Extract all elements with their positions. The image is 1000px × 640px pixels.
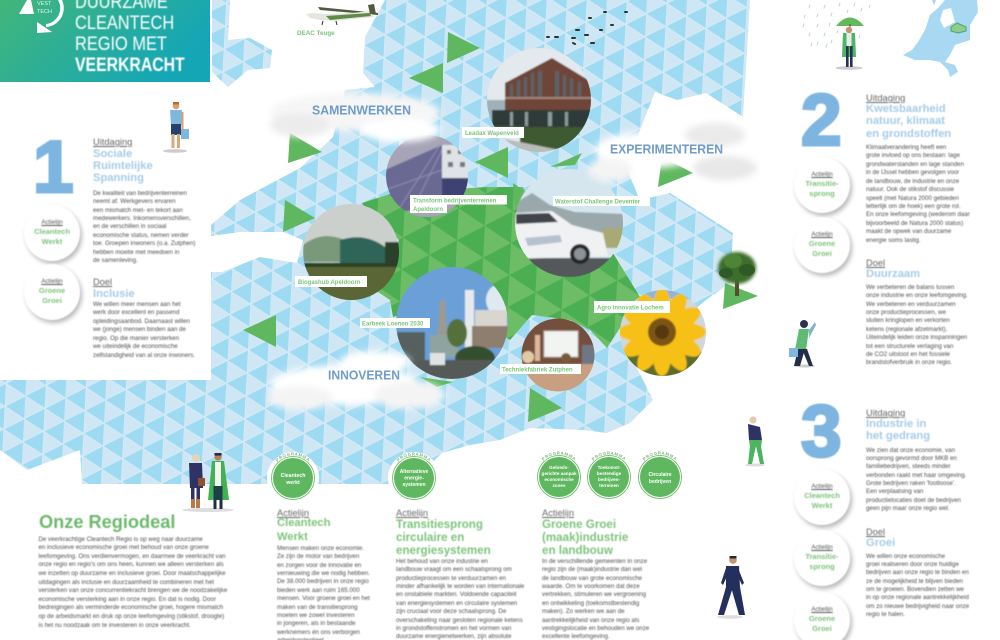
text: goal description: We willen onze economische (866, 553, 945, 560)
text: goal description: we (jonge) mensen binden aan de (93, 326, 186, 333)
text: challenge description (92, 190, 196, 264)
text: goal description: regio te halen. (866, 611, 905, 618)
circle: Actielijn Transitiesprong: Actielijn (811, 171, 833, 178)
text: challenge description: oorsprong gevormd door MKB en (866, 455, 957, 462)
badge: Toekomstbestendige bedrijventerreinen: bedrijven- (598, 477, 620, 482)
text: challenge description: letterlijk om de hoek) een grote rol. (866, 203, 961, 210)
text: challenge description: economische status, nemen verder (93, 232, 189, 239)
text: challenge description: bijvoorbeeld de Natura 2000 status) (866, 220, 963, 227)
heading: Transitiesprong circulaire en energiesystemen (396, 518, 491, 558)
text: description: Het behoud van onze industrie en (396, 558, 488, 565)
label: Actielijn: Actielijn (542, 508, 574, 518)
text: goal description: in op onze regionale aantrekkelijkheid (866, 594, 969, 601)
text: description: vertrekken, stimuleren we vergroening (542, 591, 646, 598)
photo: Techniekfabriek Zutphen (522, 318, 594, 392)
text: description: waarde. Om te voorkomen dat deze (542, 583, 640, 590)
column: Actielijn Transitiesprong (396, 508, 525, 640)
text: regiodeal description: we inzetten op duurzame en inclusieve groei. Door maatschappelijke (38, 570, 226, 577)
photo: Earbeek Loenen 2030 (396, 267, 508, 379)
text: goal description: We willen meer mensen aan het (93, 301, 181, 308)
caption: Waterstof Challenge Deventer: Waterstof Challenge Deventer (555, 200, 641, 206)
caption: Waterstof Challenge Deventer (553, 196, 650, 206)
label: Actielijn: Actielijn (277, 508, 309, 518)
label: Uitdaging: Uitdaging (93, 137, 132, 147)
text: description: regio zijn de (maak)industrie dan wel (542, 566, 642, 573)
photo: Transform bedrijventerreinen (386, 135, 468, 217)
white left panel background (0, 82, 211, 380)
column: Actielijn Groene Groei (542, 508, 650, 640)
text: goal description: regio. Op die manier versterken (93, 335, 179, 342)
text: description: Mensen maken onze economie. (277, 545, 364, 552)
text: description (396, 558, 525, 640)
photo: Biogashub Apeldoorn (303, 204, 399, 300)
heading: Cleantech Werkt: Cleantech (277, 517, 330, 529)
badge: Circulaire bedrijven: Circulaire (648, 472, 672, 478)
text: regiodeal description: onze regio en regio's om ons heen, kunnen we alleen versterken als (38, 561, 224, 568)
badge: Gebiedsgerichte aanpak: Gebieds- (549, 465, 569, 470)
circle: Actielijn Cleantech Werkt: Actielijn (811, 483, 833, 490)
text: description: productieprocessen te verduurzamen en (396, 575, 506, 582)
text: goal description: we uiteindelijk de economische (93, 343, 178, 350)
text: goal description (92, 301, 195, 360)
badge: Cleantech werkt: werkt (285, 480, 300, 486)
text: goal description: onze industrie en onze leefomgeving. (866, 292, 968, 299)
heading: Industrie in het gedrang: Industrie in (866, 418, 926, 430)
text: goal description: opleidingsaanbod. Daarnaast willen (93, 318, 190, 325)
text: challenge description: energie soms lastig. (866, 237, 921, 244)
circle: Actielijn Groene Groei: Groene (39, 286, 65, 295)
text: description: moeten we zowel investeren (277, 612, 354, 619)
circle: Actielijn Transitiesprong: Transitie- (805, 179, 839, 188)
text: goal description: om te groeien. Bovendien zetten we (866, 586, 964, 593)
icon: regio logo (19, 0, 64, 33)
figure: person with umbrella in the rain (803, 3, 870, 70)
caption: DEAC Teuge: DEAC Teuge (297, 30, 335, 37)
text: challenge description: geen pijn maar onze regio wel. (866, 505, 950, 512)
badge: Alternatieve energiesystemen: systemen (402, 482, 426, 488)
figure: couple (182, 453, 234, 512)
photo: Leadax Wapenveld (487, 48, 591, 152)
heading: Transitiesprong circulaire en energiesystemen: Transitiesprong (396, 518, 483, 530)
text: challenge description: de landbouw, de industrie en onze (866, 178, 959, 185)
text: description: aantrekkelijkheid van onze regio als (542, 617, 639, 624)
text: challenge description: We zien dat onze economie, van (866, 447, 955, 454)
panel: challenge 3 (794, 391, 970, 640)
panel: Onze Regiodeal (38, 512, 228, 629)
circle: Actielijn Groene Groei: Actielijn (811, 606, 833, 613)
green triangle block (362, 187, 640, 348)
circle: Actielijn Transitiesprong (794, 530, 850, 586)
text: description: werknemers én ons verborgen (277, 629, 360, 636)
title block: VEERKRACHT (75, 54, 185, 76)
text: challenge description: speelt (met Natura 2000 gebieden (866, 195, 959, 202)
heading: Sociale Ruimtelijke Spanning: Sociale (93, 148, 132, 160)
circle: Actielijn Cleantech Werkt: Werkt (812, 501, 832, 510)
heading: INNOVEREN: INNOVEREN (328, 368, 400, 382)
text: challenge description: neemt af. Werkgevers ervaren (93, 198, 175, 205)
caption: Transform bedrijventerreinen Apeldoorn: Apeldoorn (413, 207, 443, 213)
header banner (0, 0, 210, 82)
text: challenge description: familiebedrijven, steeds minder (866, 463, 951, 470)
column: Actielijn Cleantech Werkt (276, 508, 370, 640)
text: description: vestigingslocatie en behouden we onze (542, 625, 649, 632)
title block (74, 0, 186, 76)
icon: birds (547, 12, 627, 44)
text: goal description: We verbeteren en verduurzamen (866, 301, 956, 308)
title block: REGIO MET (75, 33, 167, 55)
text: description: de landbouw van grote economische (542, 575, 642, 582)
panel: challenge 1 (24, 127, 196, 360)
caption: Biogashub Apeldoorn (295, 276, 367, 287)
badge: Cleantech werkt: PROGRAMMA (276, 452, 310, 462)
text: description: overschakeling naar gesloten regionale ketens (396, 617, 523, 624)
text: description: vernieuwing die we nodig hebben. (277, 570, 370, 577)
circle: Actielijn Transitiesprong: Transitie- (805, 552, 839, 561)
text: goal description: groei realiseren door onze huidige (866, 561, 959, 568)
text: challenge description: een mismatch met- en tekort aan (93, 207, 183, 214)
heading: Groene Groei (maak)industrie en landbouw (542, 518, 628, 556)
text: description (542, 558, 650, 640)
text: regiodeal description (38, 536, 228, 629)
text: challenge description: medewerkers. Inkomensverschillen, (93, 215, 191, 222)
caption: Techniekfabriek Zutphen (500, 364, 581, 374)
text: description: en zorgen voor de innovatie en (277, 562, 361, 569)
label: Uitdaging: Uitdaging (866, 93, 905, 103)
badge: Gebiedsgerichte aanpak: zones (552, 483, 566, 488)
text: description: Ze zijn de motor van bedrijven (277, 553, 359, 560)
heading: Sociale Ruimtelijke Spanning (93, 148, 153, 184)
text: goal description: zelfstandigheid van al onze inwoners. (93, 352, 195, 359)
triangle background pattern (0, 0, 750, 484)
text: description: van energiesystemen en circulaire systemen (396, 600, 517, 607)
panel: challenge 2 (794, 80, 970, 366)
caption: Earbeek Loenen 2030 (360, 318, 430, 328)
text: description: en ontwikkeling (toekomstbestendig (542, 600, 639, 607)
circle: Actielijn Cleantech Werkt (24, 205, 80, 261)
heading: Groei: Groei (866, 537, 895, 549)
text: regiodeal description: bedreigingen als verminderde economische groei, hogere mismatch (38, 604, 223, 611)
circle: Actielijn Groene Groei (794, 592, 850, 640)
text: regiodeal description: op de arbeidsmarkt en druk op onze leefomgeving (stikstof, droogte) (38, 613, 224, 620)
circle: Actielijn Groene Groei: Groei (812, 249, 832, 258)
badge: Circulaire bedrijven: bedrijven (649, 479, 671, 485)
text: challenge description: grote invloed op ons bestaan: lage (866, 152, 960, 159)
label: Doel: Doel (93, 277, 112, 287)
badge: Gebiedsgerichte aanpak: gerichte aanpak (542, 471, 577, 476)
text: challenge description: Een verplaatsing van (866, 488, 923, 495)
text: description: in jongeren, als in bestaande (277, 620, 356, 627)
heading: Sociale Ruimtelijke Spanning: Ruimtelijke (93, 160, 153, 172)
text: description: maken). Zo werken we aan de (542, 608, 625, 615)
text: goal description: ketens (regionale afzetmarkt). (866, 326, 947, 333)
circle: Actielijn Cleantech Werkt: Werkt (42, 237, 62, 246)
text: goal description: tot een structurele verlaging van (866, 343, 953, 350)
circle: Actielijn Transitiesprong: Actielijn (811, 544, 833, 551)
clouds (268, 93, 757, 410)
text: challenge description: De kwaliteit van bedrijventerreinen (93, 190, 187, 197)
text: goal description: We verbeteren de balans tussen (866, 284, 954, 291)
figure: woman with bag (789, 320, 816, 368)
heading: Duurzaam: Duurzaam (866, 268, 920, 280)
text: challenge description: productielocaties doet de bedrijven (866, 497, 961, 504)
caption: Agro innovatie Lochem (594, 301, 670, 313)
text: challenge description: maakt de opwek van duurzame (866, 228, 951, 235)
text: challenge description: toe. Groepen inwoners (o.a. Zutphen) (93, 240, 195, 247)
text: regiodeal description: versterken van onze concurrentiekracht brengen we de noodzakelijke (38, 587, 227, 594)
circle: Actielijn Groene Groei: Groene (809, 614, 835, 623)
badge: Circulaire bedrijven (638, 452, 682, 499)
caption: Biogashub Apeldoorn: Biogashub Apeldoorn (298, 280, 361, 286)
text: challenge description: hebben moeite met meedoen in (93, 249, 179, 256)
circle: Actielijn Groene Groei: Groene (809, 239, 835, 248)
photo: Agro innovatie Lochem (sunflower) (620, 290, 706, 376)
caption: Techniekfabriek Zutphen: Techniekfabriek Zutphen (502, 368, 573, 374)
text: goal description (866, 284, 968, 366)
text: description: In de verschillende gemeenten in onze (542, 558, 647, 565)
green accent triangles (243, 32, 758, 422)
icon: plane (306, 4, 378, 25)
text: challenge description: in de IJssel hebben gevolgen voor (866, 169, 959, 176)
icon: regio logo: TECH (37, 9, 52, 15)
text: description: en onstabiele markten. Voldoende capaciteit (396, 591, 517, 598)
text: description: minder afhankelijk te worden van internationale (396, 583, 524, 590)
text: challenge description: Klimaatverandering heeft een (866, 144, 946, 151)
heading: Groene Groei (maak)industrie en landbouw: en landbouw (542, 544, 613, 556)
text: goal description: brandstofverbruik in onze regio. (866, 359, 952, 366)
heading: Industrie in het gedrang (866, 418, 930, 442)
text: challenge description: en de verschillen in sociaal (93, 223, 166, 230)
circle: Actielijn Groene Groei (24, 264, 80, 320)
text: description: De 38.000 bedrijven in onze regio (277, 578, 369, 585)
figure: woman walking (745, 416, 765, 466)
badge: Cleantech werkt (271, 452, 315, 500)
text: description: zijn cruciaal voor deze schaalsprong. De (396, 608, 506, 615)
title block: CLEANTECH (75, 12, 174, 34)
heading: Kwetsbaarheid natuur, klimaat en grondstoffen: natuur, klimaat (866, 115, 945, 127)
badge: Toekomstbestendige bedrijventerreinen: terreinen (599, 483, 619, 488)
circle: Actielijn Groene Groei (794, 217, 850, 273)
caption: Leadax Wapenveld (462, 127, 524, 138)
caption: Agro innovatie Lochem: Agro innovatie Lochem (597, 306, 664, 312)
badge: Toekomstbestendige bedrijventerreinen: bestendige (597, 471, 622, 476)
heading: Cleantech Werkt: Werkt (277, 531, 308, 543)
heading: Cleantech Werkt (276, 517, 330, 543)
circle: Actielijn Groene Groei: Actielijn (811, 231, 833, 238)
number 2: 2 (801, 80, 842, 161)
circle: Actielijn Transitiesprong (794, 157, 850, 213)
text: challenge description: Grote bedrijven raken 'footloose'. (866, 480, 956, 487)
text: challenge description (866, 447, 966, 512)
text: challenge description (866, 144, 970, 244)
text: goal description: bedrijven aan onze regio te binden en (866, 569, 969, 576)
badge: Toekomstbestendige bedrijventerreinen: PROGRAMMA (592, 452, 626, 461)
text: regiodeal description: uitdagingen als inclusie en duurzaamheid te combineren met het (38, 579, 214, 586)
heading: Transitiesprong circulaire en energiesystemen: circulaire en (396, 530, 464, 544)
caption: Leadax Wapenveld: Leadax Wapenveld (465, 131, 519, 137)
icon: regio logo: VEST (37, 1, 52, 7)
white halos behind programme badges (267, 452, 440, 504)
heading: Onze Regiodeal: Onze Regiodeal (39, 512, 175, 532)
text: goal description: de CO2 uitstoot en het fossiele (866, 351, 950, 358)
text: regiodeal description: economische versterking aan in onze regio. En dat is nodig. Door (38, 596, 216, 603)
text: goal description: Uiteindelijk leiden onze inspanningen (866, 334, 967, 341)
text: goal description: werk door excellent en passend (93, 309, 179, 316)
text: goal description (866, 553, 970, 618)
label: Actielijn: Actielijn (396, 508, 428, 518)
badge: Gebiedsgerichte aanpak: economische (544, 477, 574, 482)
text: regiodeal description: is het nu noodzaak om te investeren in onze veerkracht. (38, 622, 191, 629)
text: description: mensen. Voor groene groei en het (277, 595, 370, 602)
circle: Actielijn Cleantech Werkt (794, 469, 850, 525)
circle: Actielijn Groene Groei: Groei (42, 296, 62, 305)
figure: man walking in suit (717, 556, 745, 619)
text: regiodeal description: leefomgeving. Ons verdienvermogen, en daarmee de veerkracht van (38, 553, 226, 560)
text: regiodeal description: De veerkrachtige Cleantech Regio is op weg naar duurzame (38, 536, 203, 543)
label: Doel: Doel (866, 258, 885, 268)
text: challenge description: natuur. Ook de stikstof discussie (866, 186, 954, 193)
heading: EXPERIMENTEREN: EXPERIMENTEREN (610, 142, 723, 156)
text: description (276, 545, 370, 640)
label: Doel: Doel (866, 527, 885, 537)
heading: Kwetsbaarheid natuur, klimaat en grondstoffen: Kwetsbaarheid (866, 103, 946, 115)
heading: SAMENWERKEN: SAMENWERKEN (312, 104, 411, 118)
label: Uitdaging: Uitdaging (866, 408, 905, 418)
badge: Cleantech werkt: Cleantech (281, 473, 305, 479)
circle: Actielijn Transitiesprong: sprong (809, 189, 835, 198)
figure: person with shopping bag (163, 102, 189, 153)
caption: Transform bedrijventerreinen Apeldoorn (410, 195, 507, 213)
photo: Waterstof Challenge Deventer (515, 169, 623, 277)
icon: tree (718, 252, 756, 296)
badge: Alternatieve energiesystemen: energie- (404, 476, 424, 482)
text: goal description: ze de mogelijkheid te blijven bieden (866, 578, 963, 585)
text: goal description: onze productieprocessen, we (866, 309, 946, 316)
text: description: maken van de transitiesprong (277, 604, 358, 611)
text: challenge description: de samenleving. (93, 257, 138, 264)
text: regiodeal description: en inclusieve economische groei met behoud van onze groene (38, 544, 209, 551)
circle: Actielijn Groene Groei: Groei (812, 624, 832, 633)
badge: Alternatieve energiesystemen (392, 452, 436, 500)
heading: Transitiesprong circulaire en energiesystemen: energiesystemen (396, 544, 491, 556)
badge: Toekomstbestendige bedrijventerreinen (587, 452, 631, 499)
circle: Actielijn Groene Groei: Actielijn (41, 278, 63, 285)
number 1: 1 (33, 127, 74, 208)
text: challenge description: verbonden raakt met haar omgeving. (866, 472, 966, 479)
caption: Transform bedrijventerreinen Apeldoorn: Transform bedrijventerreinen (413, 198, 497, 204)
badge: Gebiedsgerichte aanpak: PROGRAMMA (542, 452, 576, 461)
heading: Groene Groei (maak)industrie en landbouw: (maak)industrie (542, 530, 628, 544)
badge: Alternatieve energiesystemen: PROGRAMMA (396, 452, 430, 462)
text: challenge description: En onze leefomgeving (wederom daar (866, 211, 970, 218)
text: description: landbouw vraagt om een schaalsprong om (396, 566, 512, 573)
heading: Sociale Ruimtelijke Spanning: Spanning (93, 172, 144, 184)
heading: Inclusie: Inclusie (93, 288, 135, 300)
heading: Industrie in het gedrang: het gedrang (866, 430, 930, 442)
text: description: in grondstoffenstromen en het vormen van (396, 625, 511, 632)
circle: Actielijn Cleantech Werkt: Cleantech (804, 491, 840, 500)
badge: Alternatieve energiesystemen: Alternatieve (400, 469, 429, 475)
heading: Kwetsbaarheid natuur, klimaat en grondstoffen (866, 103, 951, 140)
circle: Actielijn Cleantech Werkt: Cleantech (34, 227, 70, 236)
circle: Actielijn Transitiesprong: sprong (809, 562, 835, 571)
caption: Earbeek Loenen 2030: Earbeek Loenen 2030 (362, 322, 424, 328)
map: the Netherlands (903, 0, 978, 77)
text: description: bieden werk aan ruim 165.000 (277, 587, 360, 594)
badge: Gebiedsgerichte aanpak (537, 452, 581, 499)
circle: Actielijn Cleantech Werkt: Actielijn (41, 219, 63, 226)
badge: Circulaire bedrijven: PROGRAMMA (642, 452, 676, 461)
text: challenge description: grondwaterstanden en lage standen (866, 161, 964, 168)
number 3: 3 (801, 391, 842, 472)
text: goal description: om zo nieuwe bedrijvigheid naar onze (866, 603, 969, 610)
text: goal description: sluiten kringlopen en verkorten (866, 317, 950, 324)
heading: Kwetsbaarheid natuur, klimaat en grondstoffen: en grondstoffen (866, 128, 951, 140)
badge: Toekomstbestendige bedrijventerreinen: Toekomst- (598, 465, 621, 470)
heading: Groene Groei (maak)industrie en landbouw: Groene Groei (542, 518, 616, 530)
